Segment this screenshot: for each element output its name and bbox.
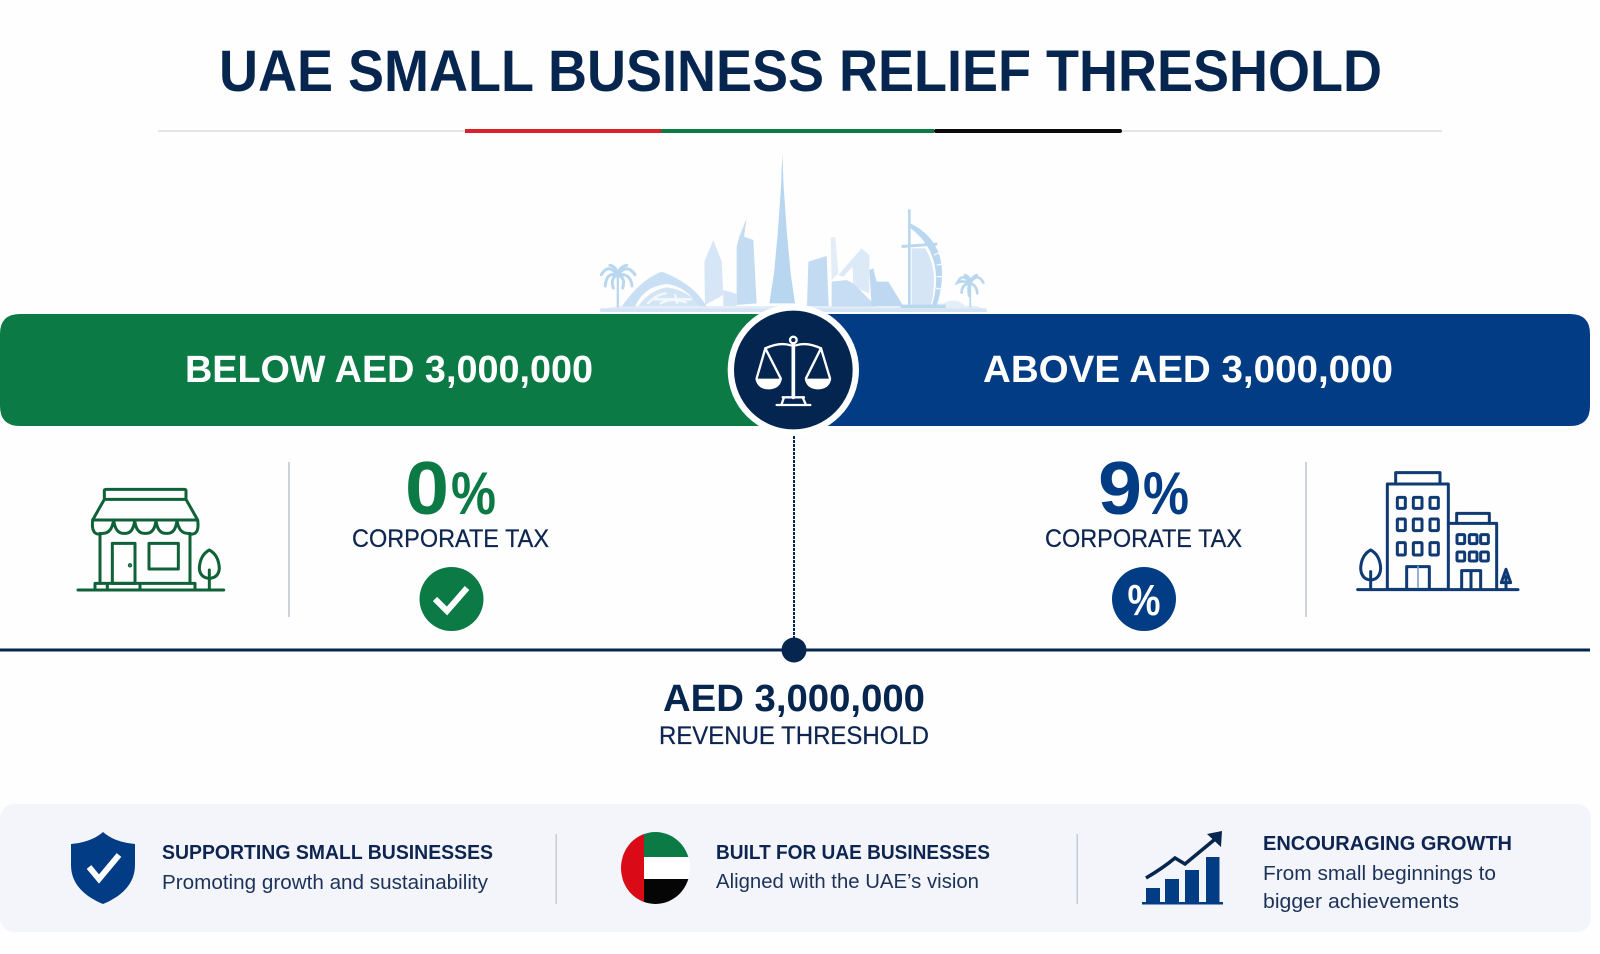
text: encouraging growth: bigger achievements bbox=[1263, 890, 1459, 913]
text: built for UAE businesses bbox=[716, 842, 990, 893]
text: 9% corporate tax: CORPORATE TAX bbox=[1045, 525, 1242, 553]
label: below AED 3,000,000: BELOW AED 3,000,000 bbox=[185, 349, 593, 391]
text: 0% corporate tax bbox=[352, 446, 549, 553]
icon: blue percent badge bbox=[1112, 567, 1176, 631]
divider left bbox=[288, 462, 290, 617]
divider two bbox=[1076, 834, 1078, 904]
text: encouraging growth: From small beginnings to bbox=[1263, 862, 1496, 885]
icon: blue percent badge: % bbox=[1128, 576, 1160, 625]
icon: small shop bbox=[78, 489, 224, 590]
icon: shield check bbox=[71, 832, 135, 904]
text: supporting small businesses: Promoting growth and sustainability bbox=[162, 871, 489, 894]
icon: green check badge bbox=[420, 567, 484, 631]
text: 9% corporate tax bbox=[1045, 446, 1242, 553]
text: built for UAE businesses: Aligned with the UAE’s vision bbox=[716, 870, 979, 893]
icon: scales of justice badge bbox=[728, 304, 859, 436]
text: 0% corporate tax: CORPORATE TAX bbox=[352, 525, 549, 553]
text: 0% corporate tax: % bbox=[451, 460, 496, 527]
text: 0% corporate tax: 0 bbox=[405, 446, 449, 530]
text: encouraging growth: ENCOURAGING GROWTH bbox=[1263, 833, 1512, 855]
text: 9% corporate tax: % bbox=[1143, 460, 1189, 527]
text: built for UAE businesses: BUILT FOR UAE BUSINESSES bbox=[716, 842, 990, 864]
panel: bottom benefits strip bbox=[0, 804, 1591, 932]
text: 9% corporate tax: 9 bbox=[1098, 446, 1142, 530]
text: supporting small businesses: SUPPORTING SMALL BUSINESSES bbox=[162, 842, 493, 864]
text: supporting small businesses bbox=[162, 842, 493, 894]
icon: growth chart bbox=[1142, 831, 1223, 904]
vertical dotted connector bbox=[793, 432, 795, 645]
text: encouraging growth bbox=[1263, 833, 1512, 913]
text: revenue threshold: AED 3,000,000 bbox=[663, 678, 925, 720]
text: revenue threshold bbox=[659, 678, 929, 750]
title: UAE SMALL BUSINESS RELIEF THRESHOLD bbox=[219, 39, 1382, 104]
icon: UAE flag circle bbox=[620, 832, 692, 905]
threshold axis line with marker bbox=[0, 638, 1590, 662]
label: above AED 3,000,000: ABOVE AED 3,000,000 bbox=[983, 349, 1393, 391]
icon: office buildings bbox=[1358, 473, 1518, 590]
title underline in UAE colours bbox=[158, 129, 1442, 133]
panel: above threshold bar bbox=[793, 314, 1590, 426]
text: revenue threshold: REVENUE THRESHOLD bbox=[659, 722, 929, 750]
divider right bbox=[1305, 462, 1307, 617]
divider one bbox=[556, 834, 557, 904]
icon: Dubai skyline bbox=[600, 153, 988, 312]
panel: below threshold bar bbox=[0, 314, 793, 426]
